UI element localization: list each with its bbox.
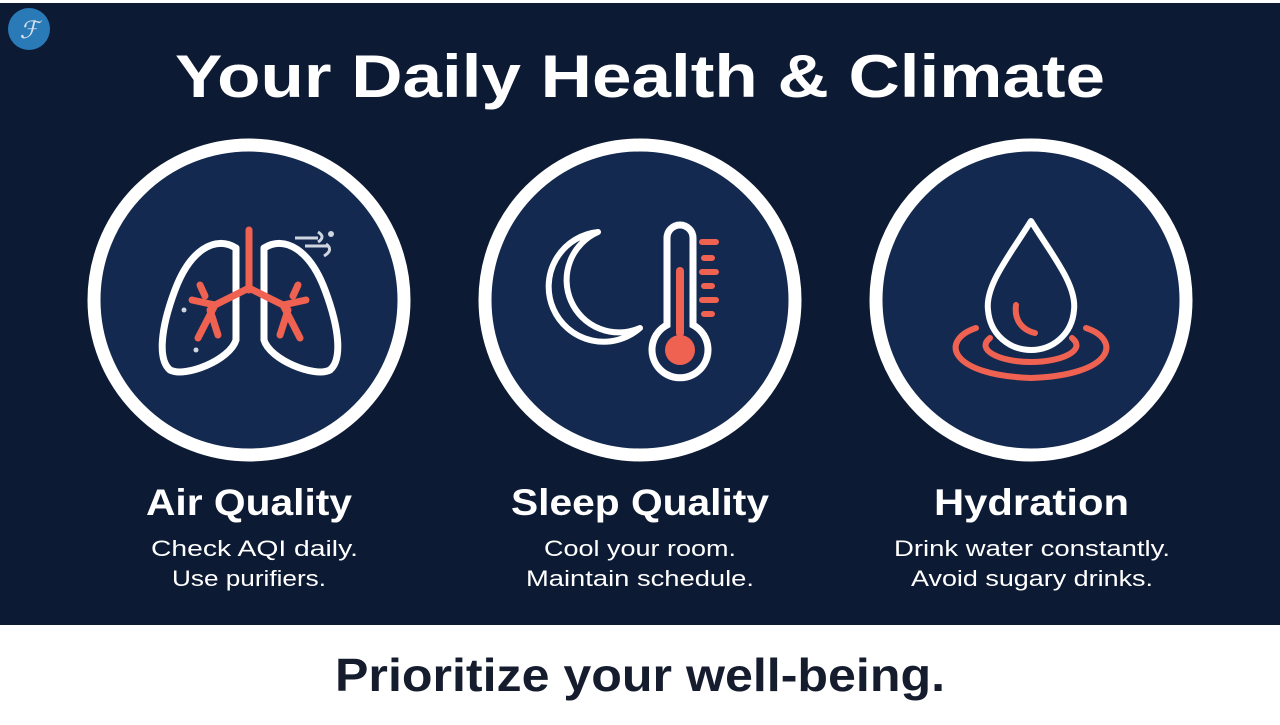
icon: lungs circle xyxy=(94,145,404,455)
text: sleep tips: Cool your room. xyxy=(544,536,736,561)
panel: hydration xyxy=(876,145,1186,591)
icon: moon and thermometer xyxy=(485,145,795,455)
title: Your Daily Health & Climate xyxy=(175,43,1105,110)
text: air quality tips: Check AQI daily. xyxy=(151,536,358,561)
heading: hydration: Hydration xyxy=(934,482,1129,523)
panel: air quality xyxy=(94,145,404,591)
text: hydration tips: Drink water constantly. xyxy=(894,536,1170,561)
text: hydration tips xyxy=(894,536,1170,591)
text: sleep tips: Maintain schedule. xyxy=(526,566,754,591)
icon: water drop xyxy=(876,145,1186,455)
text: hydration tips: Avoid sugary drinks. xyxy=(911,566,1153,591)
text: air quality tips: Use purifiers. xyxy=(172,566,326,591)
panel: sleep quality xyxy=(485,145,795,591)
text: sleep tips xyxy=(526,536,754,591)
icon: logo: ℱ xyxy=(20,17,43,44)
heading: air quality: Air Quality xyxy=(146,482,352,523)
icon: logo xyxy=(8,8,50,50)
heading: sleep quality: Sleep Quality xyxy=(511,482,769,523)
text: air quality tips xyxy=(151,536,358,591)
footer text: Prioritize your well-being. xyxy=(335,649,945,701)
